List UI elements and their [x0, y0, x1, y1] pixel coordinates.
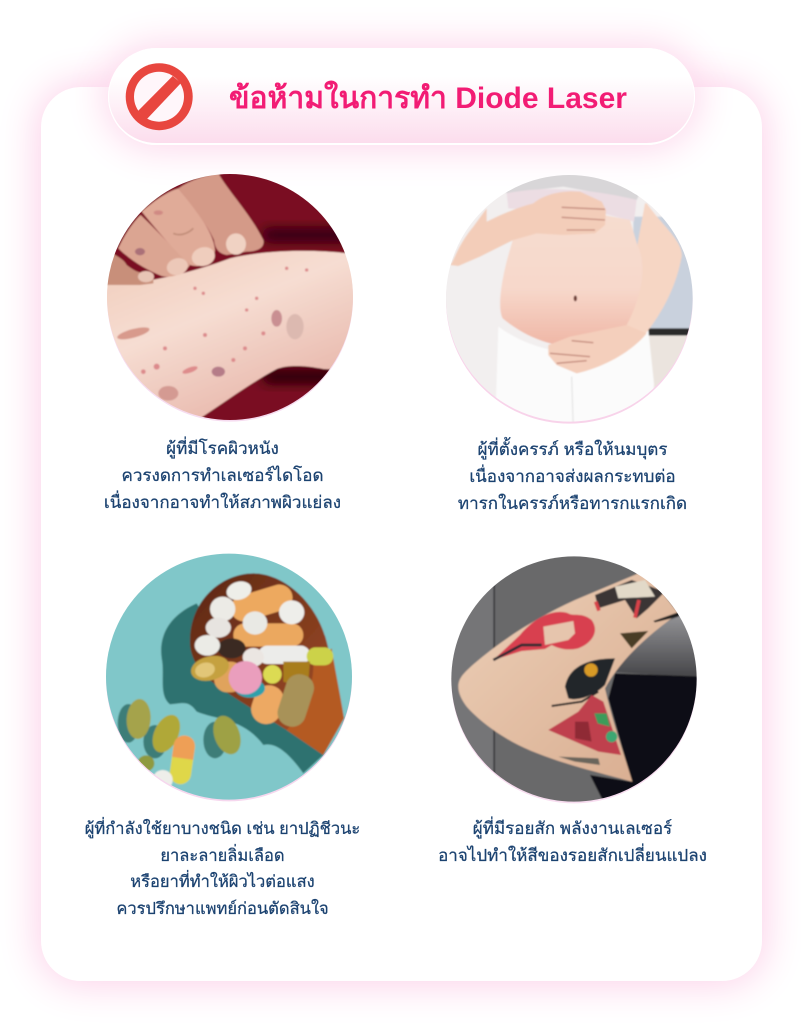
text: pregnancy: ผู้ที่ตั้งครรภ์ หรือให้นมบุตร — [478, 440, 667, 459]
text: pregnancy: เนื่องจากอาจส่งผลกระทบต่อ — [469, 467, 676, 486]
text: skin disease: ควรงดการทำเลเซอร์ไดโอด — [122, 466, 324, 485]
panel: main card — [41, 87, 762, 981]
text: tattoo — [438, 816, 707, 864]
text: medication: ผู้ที่กำลังใช้ยาบางชนิด เช่น ยาปฏิชีวนะ — [85, 820, 360, 838]
image: pills in wooden spoon — [100, 548, 360, 808]
text: pregnancy: ทารกในครรภ์หรือทารกแรกเกิด — [458, 494, 687, 513]
text: medication: ยาละลายลิ่มเลือด — [160, 846, 285, 864]
header pill — [108, 48, 695, 145]
text: skin disease: เนื่องจากอาจทำให้สภาพผิวแย่ลง — [104, 493, 341, 512]
text: tattoo: ผู้ที่มีรอยสัก พลังงานเลเซอร์ — [473, 819, 672, 838]
text: medication — [85, 816, 360, 918]
text: skin disease: ผู้ที่มีโรคผิวหนัง — [166, 439, 279, 458]
text: medication: ควรปรึกษาแพทย์ก่อนตัดสินใจ — [116, 900, 329, 918]
text: skin disease — [104, 436, 341, 512]
image: pregnant belly — [446, 175, 693, 424]
image: hand scratching skin — [100, 170, 360, 430]
text: tattoo: อาจไปทำให้สีของรอยสักเปลี่ยนแปลง — [438, 846, 707, 864]
image: tattooed arm — [445, 552, 705, 808]
title: ข้อห้ามในการทำ Diode Laser — [229, 82, 627, 115]
text: medication: หรือยาที่ทำให้ผิวไวต่อแสง — [130, 873, 315, 891]
icon: prohibition sign — [126, 63, 193, 130]
text: pregnancy — [458, 436, 687, 513]
